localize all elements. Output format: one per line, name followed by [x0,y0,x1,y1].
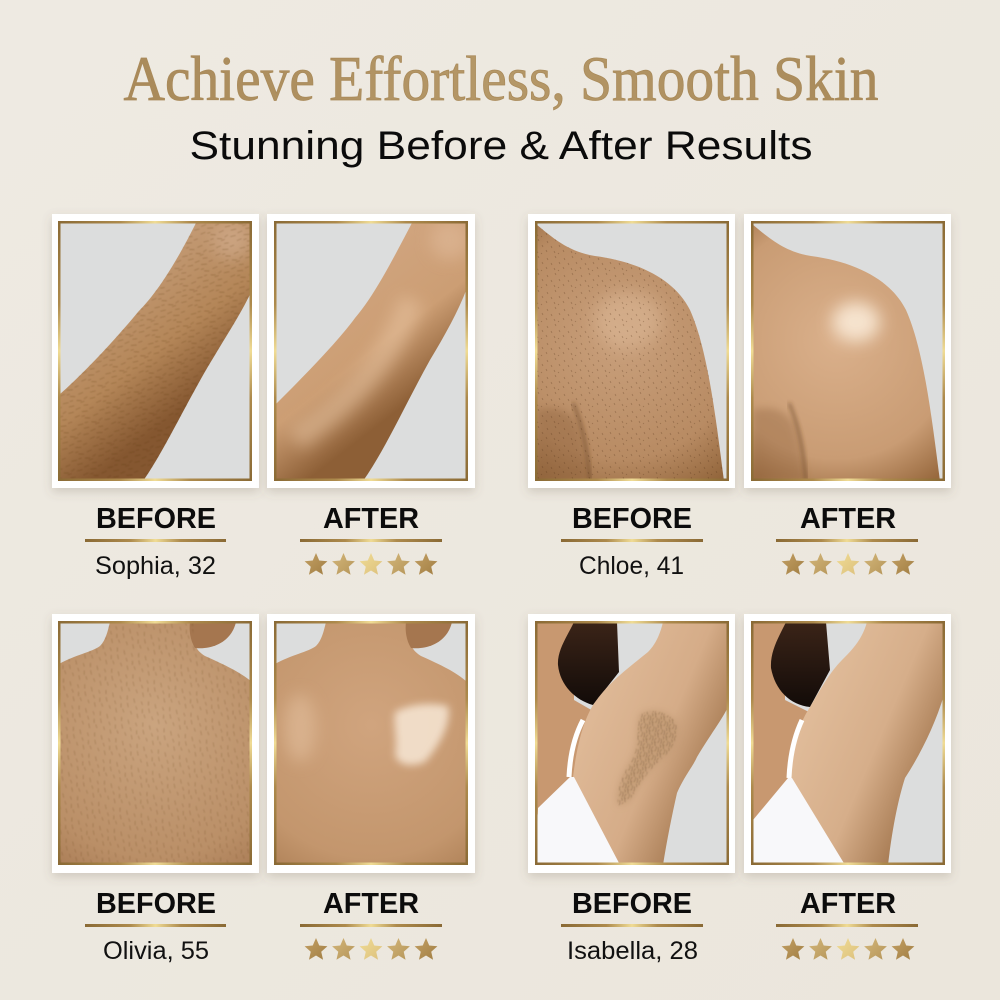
caption: Olivia before: BEFORE [96,888,216,920]
caption: Sophia after with stars: AFTER [323,503,419,535]
caption: Isabella after with stars [776,888,918,960]
caption: Olivia before: Olivia, 55 [103,937,209,965]
caption: Sophia after with stars [300,503,442,575]
caption: Sophia before: BEFORE [96,503,216,535]
caption: Isabella before: Isabella, 28 [567,937,698,965]
panel: back after photo [267,614,475,873]
panel: shoulder after photo [744,214,951,488]
caption: Chloe after with stars: AFTER [800,503,896,535]
caption: Olivia after with stars: AFTER [323,888,419,920]
subtitle: Stunning Before & After Results [190,124,812,168]
caption: Isabella before [561,888,703,965]
caption: Chloe before: Chloe, 41 [579,552,684,580]
panel: underarm after photo [744,614,951,873]
caption: Chloe after with stars [776,503,918,575]
caption: Isabella after with stars: AFTER [800,888,896,920]
caption: Isabella before: BEFORE [572,888,692,920]
panel: arm before photo [52,214,259,488]
caption: Chloe before [561,503,703,580]
panel: back before photo [52,614,259,873]
caption: Olivia after with stars [300,888,442,960]
title: Achieve Effortless, Smooth Skin [124,44,878,114]
caption: Chloe before: BEFORE [572,503,692,535]
panel: arm after photo [267,214,475,488]
panel: underarm before photo [528,614,735,873]
caption: Sophia before [85,503,226,580]
caption: Olivia before [85,888,226,965]
caption: Sophia before: Sophia, 32 [95,552,216,580]
panel: shoulder before photo [528,214,735,488]
